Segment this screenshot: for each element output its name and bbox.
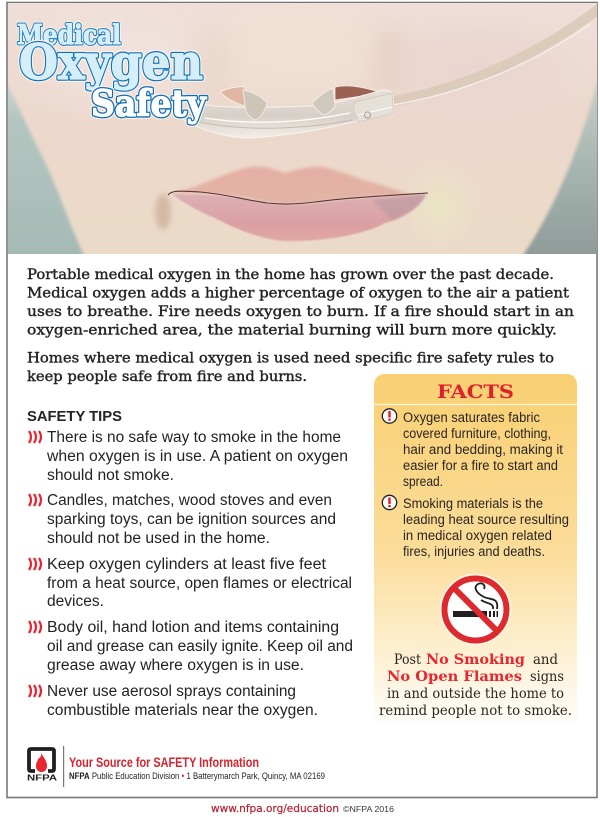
- title: Medical Oxygen Safety: [17, 20, 207, 125]
- tip 2: should not be used in the home.: [47, 530, 270, 547]
- tip 4: oil and grease can easily ignite. Keep oil and: [47, 638, 353, 655]
- tip 1: There is no safe way to smoke in the home: [47, 429, 341, 446]
- heading: facts: FACTS: [437, 381, 514, 403]
- title word: Medical: Medical: [17, 20, 121, 51]
- footer: NFPA logo: NFPA: [27, 774, 57, 782]
- callout: post signs: No Open Flames: [387, 669, 522, 685]
- tip 3: Keep oxygen cylinders at least five feet: [47, 556, 327, 573]
- tip 5: Never use aerosol sprays containing: [47, 683, 296, 700]
- intro text block: Medical oxygen adds a higher percentage of oxygen to the air a patient: [27, 286, 569, 302]
- intro text block: uses to breathe. Fire needs oxygen to burn. If a fire should start in an: [27, 304, 574, 320]
- panel: facts: [374, 374, 577, 722]
- left background: [8, 84, 86, 254]
- title word: Oxygen: Oxygen: [19, 33, 203, 91]
- cannula: [175, 88, 394, 138]
- callout: post signs: Post: [394, 652, 422, 668]
- callout: post signs: No Smoking: [426, 652, 525, 668]
- nostrils: [220, 86, 382, 106]
- fact 2: Smoking materials is the: [403, 496, 543, 511]
- fact 1: [382, 409, 563, 489]
- tip 4: grease away where oxygen is in use.: [47, 657, 304, 674]
- fact 1: spread.: [403, 474, 443, 489]
- footer: source line: Your Source for SAFETY Information: [69, 755, 259, 770]
- photo: face with nasal cannula: [0, 3, 600, 260]
- tip 2: Candles, matches, wood stoves and even: [47, 492, 332, 509]
- tip 3: from a heat source, open flames or electrical: [47, 575, 352, 592]
- fact 1: covered furniture, clothing,: [403, 426, 551, 441]
- intro text block: [27, 267, 574, 385]
- fact 1: Oxygen saturates fabric: [403, 410, 540, 425]
- tip 5: [29, 683, 318, 719]
- tip 1: [29, 429, 348, 484]
- intro text block: Portable medical oxygen in the home has grown over the past decade.: [27, 267, 554, 283]
- fact 1: easier for a fire to start and: [403, 458, 558, 473]
- fact 2: [382, 495, 569, 559]
- safety tips list: [29, 429, 353, 719]
- callout: post signs: in and outside the home to: [387, 686, 564, 702]
- title word: Oxygen: Oxygen: [19, 33, 203, 91]
- fact 2: fires, injuries and deaths.: [403, 544, 545, 559]
- intro text block: oxygen-enriched area, the material burning will burn more quickly.: [27, 322, 557, 338]
- tip 1: should not smoke.: [47, 467, 174, 484]
- footer divider: [63, 746, 64, 787]
- footer: NFPA logo: [27, 749, 57, 782]
- callout: post signs: and: [533, 652, 558, 668]
- callout: post signs: [379, 652, 572, 719]
- footer: website and copyright: www.nfpa.org/education: [211, 802, 339, 815]
- fact 2: in medical oxygen related: [403, 528, 552, 543]
- title word: Safety: Safety: [91, 83, 207, 125]
- heading: safety tips: SAFETY TIPS: [27, 408, 122, 425]
- tip 1: when oxygen is in use. A patient on oxygen: [46, 448, 348, 465]
- tip 3: devices.: [47, 593, 104, 610]
- nose and cheek shading: [40, 5, 560, 233]
- lips: [168, 167, 428, 241]
- tip 4: [29, 619, 353, 674]
- callout: post signs: signs: [530, 669, 564, 685]
- callout: post signs: remind people not to smoke.: [379, 703, 572, 719]
- title word: Safety: Safety: [91, 83, 207, 125]
- tip 2: sparking toys, can be ignition sources and: [47, 511, 336, 528]
- right background: [522, 80, 597, 254]
- footer: address: NFPA Public Education Division • 1 Batterymarch Park, Quincy, MA 02169: [69, 771, 325, 781]
- title word: Oxygen: Oxygen: [19, 33, 203, 91]
- tip 4: Body oil, hand lotion and items containing: [47, 619, 339, 636]
- intro text block: Homes where medical oxygen is used need specific fire safety rules to: [27, 350, 554, 366]
- tip 2: [29, 492, 336, 547]
- icon: no smoking sign: [440, 574, 512, 646]
- title word: Medical: Medical: [17, 20, 121, 51]
- title word: Medical: Medical: [17, 20, 121, 51]
- tip 5: combustible materials near the oxygen.: [47, 702, 318, 719]
- fact 1: hair and bedding, making it: [403, 442, 563, 457]
- title word: Safety: Safety: [91, 83, 207, 125]
- footer: website and copyright: ©NFPA 2016: [343, 804, 394, 814]
- fact 2: leading heat source resulting: [403, 512, 569, 527]
- thin tube: [388, 8, 600, 105]
- tip 3: [29, 556, 352, 610]
- intro text block: keep people safe from fire and burns.: [27, 369, 307, 385]
